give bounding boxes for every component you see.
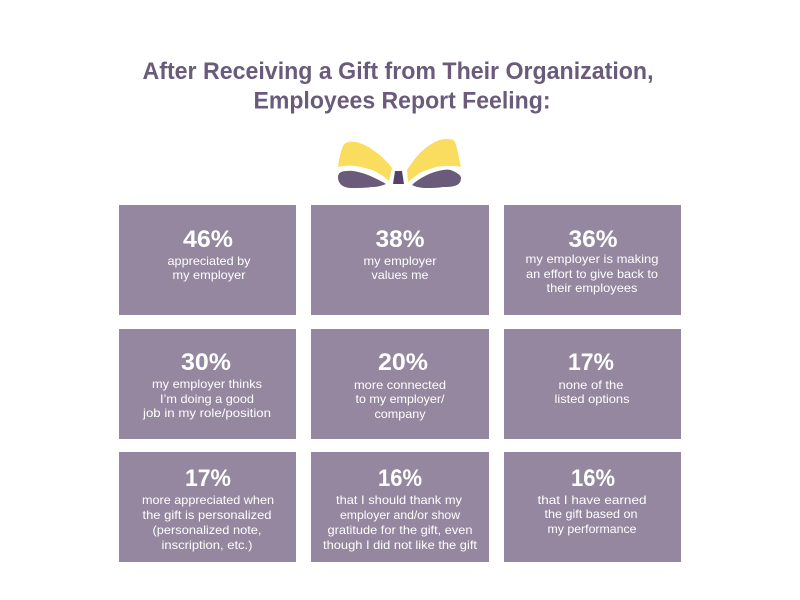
panel: 30%: job in my role/position xyxy=(142,406,271,420)
title: After Receiving a Gift from Their Organization, xyxy=(142,58,654,85)
panel: 17% none: listed options xyxy=(554,392,630,406)
title xyxy=(142,58,654,114)
panel: 17% none: none of the xyxy=(558,378,624,392)
panel: 17% personalized: (personalized note, xyxy=(152,523,262,537)
panel: 20%: to my employer/ xyxy=(356,392,445,406)
panel: 38%: values me xyxy=(372,268,429,282)
panel: 38%: 38% xyxy=(376,226,424,253)
panel: 16% thank: 16% xyxy=(378,465,422,492)
panel: 36%: their employees xyxy=(546,281,638,295)
panel: 16% earned: the gift based on xyxy=(544,507,638,521)
panel: 17% personalized: 17% xyxy=(185,465,231,492)
panel: 16% earned xyxy=(504,452,681,562)
panel: 38%: my employer xyxy=(364,254,436,268)
panel: 16% thank: though I did not like the gift xyxy=(323,538,478,552)
panel: 16% earned: 16% xyxy=(571,465,615,492)
panel: 36%: 36% xyxy=(568,226,618,253)
panel: 36% xyxy=(504,205,681,315)
panel: 30%: my employer thinks xyxy=(152,377,262,391)
panel: 16% thank xyxy=(311,452,489,562)
panel: 46%: my employer xyxy=(172,268,246,282)
title: Employees Report Feeling: xyxy=(254,88,550,114)
panel: 46% xyxy=(119,205,296,315)
panel: 16% earned: that I have earned xyxy=(538,493,646,507)
panel: 46%: 46% xyxy=(183,226,233,253)
panel: 17% none: 17% xyxy=(568,349,614,376)
panel: 36%: an effort to give back to xyxy=(526,267,658,281)
panel: 20%: more connected xyxy=(354,378,446,392)
panel: 38% xyxy=(311,205,489,315)
panel: 46%: appreciated by xyxy=(168,254,250,268)
panel: 17% personalized: inscription, etc.) xyxy=(162,538,253,552)
panel: 17% personalized: more appreciated when xyxy=(142,493,274,507)
icon: gift bow xyxy=(338,139,461,188)
panel: 17% personalized xyxy=(119,452,296,562)
panel: 30%: I’m doing a good xyxy=(160,392,254,406)
panel: 20%: company xyxy=(374,407,426,421)
panel: 20%: 20% xyxy=(378,349,428,376)
panel: 16% earned: my performance xyxy=(548,522,637,536)
panel: 17% personalized: the gift is personalized xyxy=(142,508,272,522)
panel: 16% thank: gratitude for the gift, even xyxy=(328,523,472,537)
panel: 20% xyxy=(311,329,489,439)
panel: 30%: 30% xyxy=(181,349,231,376)
panel: 17% none xyxy=(504,329,681,439)
panel: 30% xyxy=(119,329,296,439)
panel: 16% thank: that I should thank my xyxy=(336,493,462,507)
panel: 16% thank: employer and/or show xyxy=(340,508,460,522)
panel: 36%: my employer is making xyxy=(526,252,658,266)
